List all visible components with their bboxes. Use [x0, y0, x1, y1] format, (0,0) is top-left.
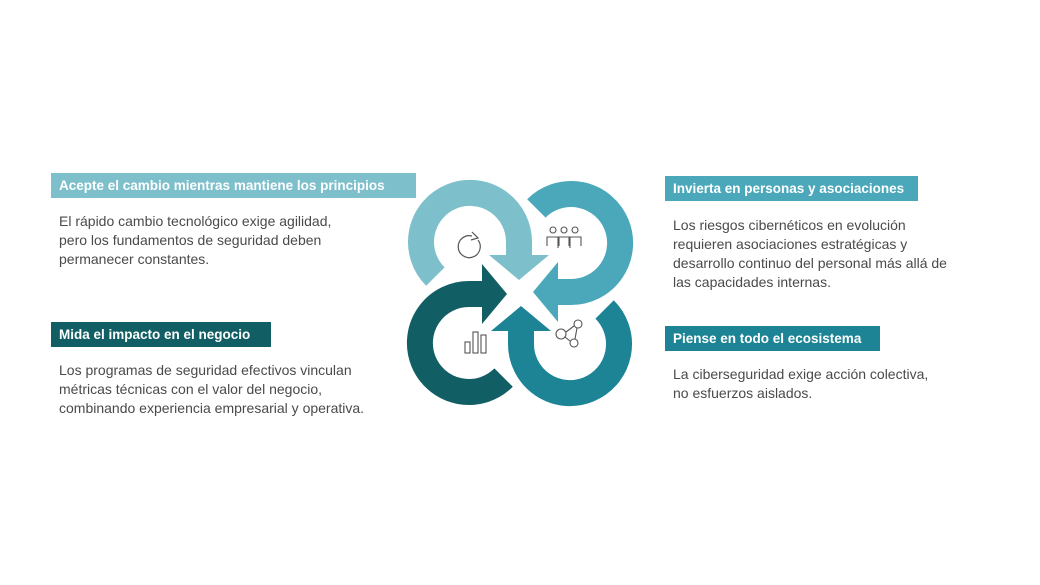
text: accept change: El rápido cambio tecnológico exige agilidad, [59, 213, 331, 229]
text: measure impact: combinando experiencia empresarial y operativa. [59, 400, 364, 416]
text: invest in people: requieren asociaciones estratégicas y [673, 236, 907, 252]
heading: measure impact [51, 322, 271, 347]
icon: network [556, 320, 582, 347]
heading: ecosystem: Piense en todo el ecosistema [673, 331, 861, 346]
text: measure impact: Los programas de seguridad efectivos vinculan [59, 362, 352, 378]
arrow: bottom-left [420, 264, 507, 392]
heading: ecosystem [665, 326, 880, 351]
arrow: top-right [533, 194, 620, 322]
heading: measure impact: Mida el impacto en el negocio [59, 327, 250, 342]
text: accept change: permanecer constantes. [59, 251, 209, 267]
text: invest in people: las capacidades internas. [673, 274, 831, 290]
text: accept change: pero los fundamentos de seguridad deben [59, 232, 321, 248]
icon: bar chart [465, 332, 486, 353]
text: ecosystem: no esfuerzos aislados. [673, 385, 812, 401]
icon: people [547, 227, 581, 248]
arrow: top-left [421, 193, 549, 280]
icon: refresh [458, 232, 480, 258]
arrow: bottom-right [491, 306, 619, 393]
heading: invest in people [665, 176, 918, 201]
heading: accept change [51, 173, 416, 198]
text: invest in people [673, 217, 947, 290]
text: ecosystem [673, 366, 928, 401]
text: invest in people: Los riesgos cibernéticos en evolución [673, 217, 906, 233]
text: invest in people: desarrollo continuo del personal más allá de [673, 255, 947, 271]
heading: invest in people: Invierta en personas y asociaciones [673, 181, 904, 196]
text: measure impact: métricas técnicas con el valor del negocio, [59, 381, 322, 397]
text: accept change [59, 213, 331, 267]
text: ecosystem: La ciberseguridad exige acción colectiva, [673, 366, 928, 382]
heading: accept change: Acepte el cambio mientras mantiene los principios [59, 178, 385, 193]
text: measure impact [59, 362, 364, 416]
